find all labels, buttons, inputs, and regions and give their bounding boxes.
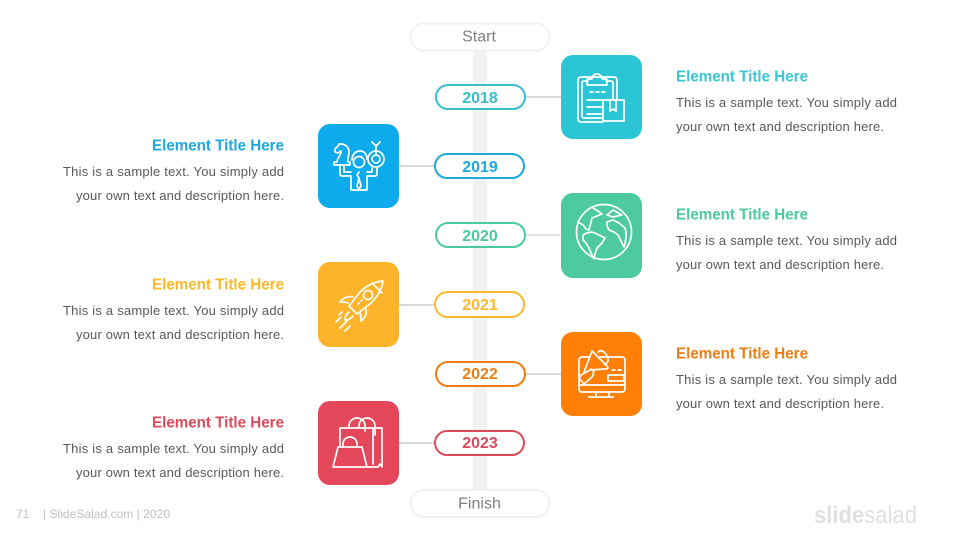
text block 2021 <box>63 276 284 342</box>
text block 2022: This is a sample text. You simply add <box>676 372 897 387</box>
year pill 2019 <box>435 154 524 178</box>
finish pill <box>410 490 550 517</box>
text block 2022 <box>676 346 897 411</box>
milestone 2021 <box>63 262 524 347</box>
text block 2019: Element Title Here <box>152 138 284 154</box>
text block 2023: your own text and description here. <box>76 465 284 480</box>
icon card: shopping bags <box>318 401 399 485</box>
connector 2018 <box>525 96 562 98</box>
footer logo: slidesalad <box>814 502 917 529</box>
footer page info: 71 <box>16 507 30 521</box>
text block 2019: your own text and description here. <box>76 188 284 203</box>
year pill 2018 <box>436 85 525 109</box>
text block 2018: Element Title Here <box>676 68 808 86</box>
text block 2021: This is a sample text. You simply add <box>63 303 284 318</box>
milestone 2019 <box>63 124 524 208</box>
icon card: megaphone on monitor <box>561 332 642 416</box>
connector 2023 <box>399 442 435 444</box>
year pill 2020: 2020 <box>462 228 498 245</box>
icon card: clipboard and box <box>561 55 642 139</box>
text block 2020: your own text and description here. <box>676 257 884 272</box>
connector 2021 <box>399 304 435 306</box>
year pill 2021 <box>435 292 524 317</box>
milestone 2018 <box>436 55 897 139</box>
text block 2020 <box>676 206 897 272</box>
text block 2018 <box>676 68 897 134</box>
start pill <box>410 24 550 50</box>
timeline spine <box>473 50 487 490</box>
connector 2020 <box>525 234 562 236</box>
text block 2019: This is a sample text. You simply add <box>63 164 284 179</box>
text block 2020: This is a sample text. You simply add <box>676 233 897 248</box>
text block 2021: Element Title Here <box>152 276 284 294</box>
text block 2020: Element Title Here <box>676 206 808 224</box>
milestone 2020 <box>436 193 897 278</box>
finish pill: Finish <box>458 496 501 512</box>
text block 2023 <box>63 414 284 480</box>
text block 2021: your own text and description here. <box>76 327 284 342</box>
year pill 2020 <box>436 223 525 247</box>
milestone 2023 <box>63 401 524 485</box>
year pill 2023: 2023 <box>462 435 498 452</box>
start pill: Start <box>462 28 496 46</box>
text block 2018: This is a sample text. You simply add <box>676 95 897 110</box>
text block 2019 <box>63 138 284 203</box>
icon card: globe <box>561 193 642 278</box>
year pill 2022: 2022 <box>462 366 498 383</box>
icon card: strategy person <box>318 124 399 208</box>
text block 2018: your own text and description here. <box>676 119 884 134</box>
text block 2023: Element Title Here <box>152 414 284 432</box>
text block 2022: Element Title Here <box>676 346 808 362</box>
year pill 2021: 2021 <box>462 297 498 314</box>
connector 2019 <box>399 165 435 167</box>
year pill 2022 <box>436 362 525 386</box>
connector 2022 <box>525 373 562 375</box>
text block 2023: This is a sample text. You simply add <box>63 441 284 456</box>
year pill 2019: 2019 <box>462 159 498 176</box>
year pill 2018: 2018 <box>462 90 498 107</box>
milestone 2022 <box>436 332 897 416</box>
footer page info: | SlideSalad.com | 2020 <box>43 507 170 521</box>
icon card: rocket <box>318 262 399 347</box>
text block 2022: your own text and description here. <box>676 396 884 411</box>
year pill 2023 <box>435 431 524 455</box>
